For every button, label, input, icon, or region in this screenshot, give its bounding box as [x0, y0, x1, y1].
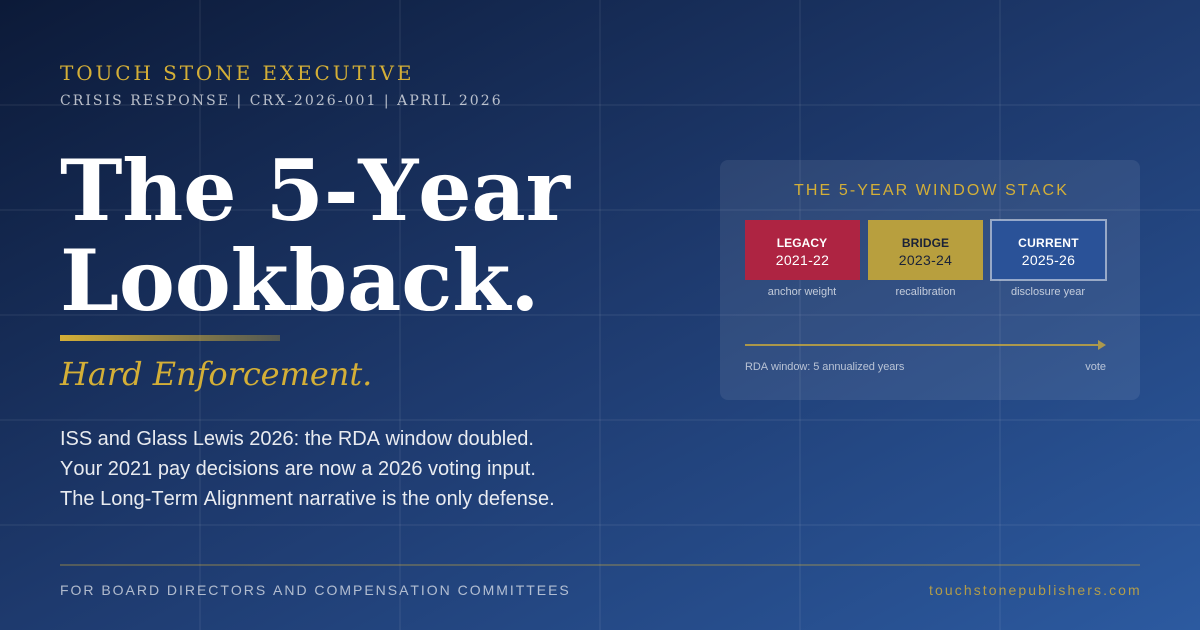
body text: Your 2021 pay decisions are now a 2026 voting input. — [60, 458, 536, 480]
block: legacy: LEGACY — [777, 236, 827, 250]
footer rule — [60, 564, 1140, 566]
footer audience: FOR BOARD DIRECTORS AND COMPENSATION COMMITTEES — [60, 582, 571, 598]
body text — [60, 428, 555, 510]
body text: ISS and Glass Lewis 2026: the RDA window doubled. — [60, 428, 534, 450]
panel: window stack — [720, 160, 1140, 400]
body text: The Long-Term Alignment narrative is the only defense. — [60, 488, 555, 510]
brand name: TOUCH STONE EXECUTIVE — [60, 61, 414, 85]
issue line: CRISIS RESPONSE | CRX-2026-001 | APRIL 2026 — [60, 93, 503, 109]
timeline arrow — [745, 340, 1106, 350]
caption: recalibration: recalibration — [896, 286, 955, 298]
title: The 5-Year — [60, 141, 572, 240]
block: bridge: 2023-24 — [899, 252, 952, 268]
gold accent bar — [60, 335, 280, 341]
title: Lookback. — [60, 231, 539, 330]
panel heading: THE 5-YEAR WINDOW STACK — [794, 182, 1069, 199]
block: current: 2025-26 — [1022, 252, 1075, 268]
block: current — [991, 220, 1106, 280]
subtitle: Hard Enforcement. — [59, 355, 372, 393]
block: legacy — [745, 220, 860, 280]
block: bridge: BRIDGE — [902, 236, 949, 250]
block: legacy: 2021-22 — [776, 252, 829, 268]
title — [60, 141, 572, 330]
caption: anchor weight: anchor weight — [768, 286, 836, 298]
block: bridge — [868, 220, 983, 280]
vote label: vote — [1085, 361, 1106, 373]
block: current: CURRENT — [1018, 236, 1079, 250]
timeline label: RDA window: 5 annualized years — [745, 361, 905, 373]
footer url: touchstonepublishers.com — [929, 582, 1142, 598]
caption: disclosure year: disclosure year — [1011, 286, 1085, 298]
